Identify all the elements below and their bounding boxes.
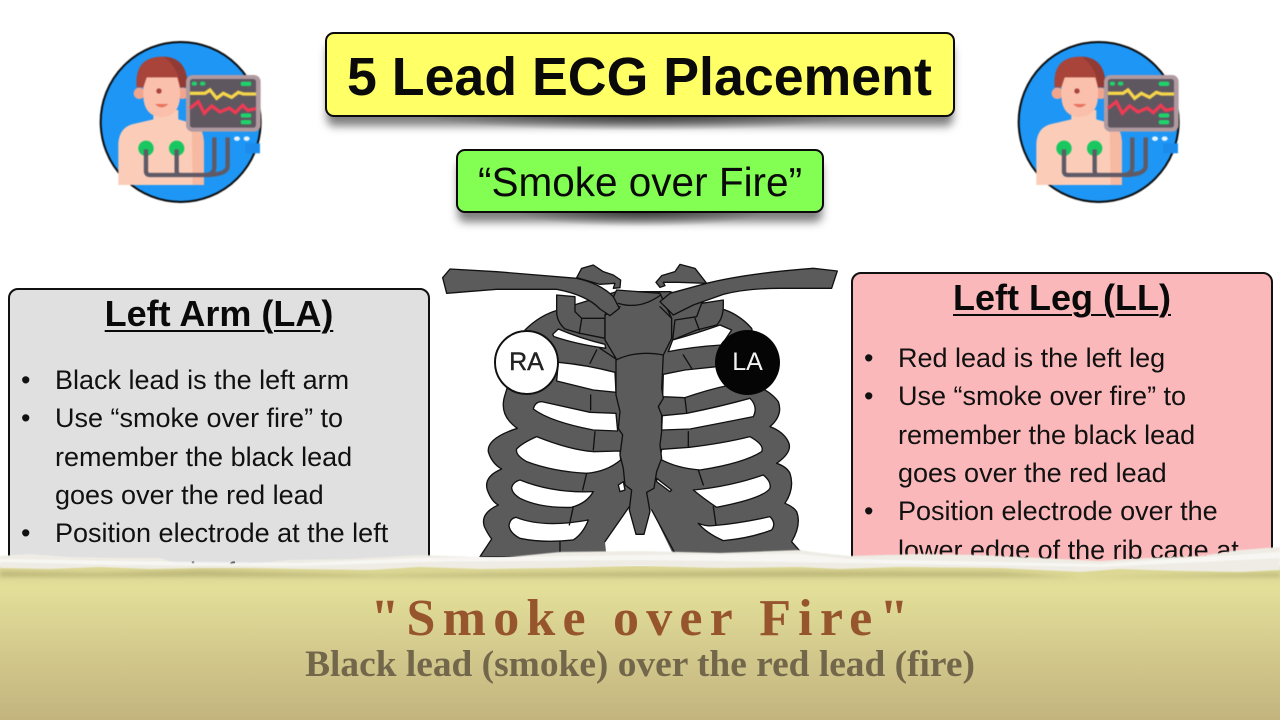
bullet list: left arm: • — [21, 403, 30, 433]
bullet list: left arm: Black lead is the left arm — [55, 365, 349, 395]
bullet list: left leg: Use “smoke over fire” to — [898, 381, 1186, 411]
panel: left arm — [8, 288, 430, 688]
bullet list: left arm: Use “smoke over fire” to — [55, 403, 343, 433]
rib silhouette — [480, 292, 805, 557]
bullet list: left arm: Position electrode at the left — [55, 518, 388, 548]
caption: explanation: Black lead (smoke) over the red lead (fire) — [305, 644, 975, 685]
heading: left leg: Left Leg (LL) — [953, 277, 1171, 318]
bullet list: left arm: goes over the red lead — [55, 480, 324, 510]
bullet list: left leg: Position electrode over the — [898, 496, 1218, 526]
bullet list: left leg: • — [864, 343, 873, 373]
bullet list: left arm: infraclavicular fossa — [55, 557, 292, 587]
torn white edge — [0, 547, 1280, 572]
bullet list: left arm: • — [21, 518, 30, 548]
bullet list: left leg: • — [864, 381, 873, 411]
title banner: 5 Lead ECG Placement — [347, 47, 932, 107]
RA electrode marker — [494, 330, 559, 395]
bullet list: left leg: goes over the red lead — [898, 458, 1167, 488]
heading: left arm: Left Arm (LA) — [105, 293, 333, 334]
bullet list: left arm: remember the black lead — [55, 442, 352, 472]
intercostal gaps — [509, 325, 774, 558]
bullet list: left leg: lower edge of the rib cage at — [898, 535, 1239, 565]
LA electrode marker: LA — [732, 348, 763, 376]
parchment background — [0, 566, 1280, 720]
sternal ends of first ribs — [577, 264, 707, 288]
RA electrode marker: RA — [509, 348, 544, 376]
title banner — [325, 32, 955, 117]
panel: left leg — [851, 272, 1273, 672]
clavicles — [443, 269, 619, 316]
bullet list: left leg: remember the black lead — [898, 420, 1195, 450]
sternum — [605, 290, 672, 534]
subtitle banner: “Smoke over Fire” — [478, 159, 802, 205]
bullet list: left arm: • — [21, 365, 30, 395]
bullet list: left leg: • — [864, 496, 873, 526]
LA electrode marker — [715, 330, 780, 395]
costal cartilage lines — [560, 318, 716, 555]
subtitle banner — [456, 149, 824, 213]
bullet list: left leg: Red lead is the left leg — [898, 343, 1165, 373]
bullet list: left leg — [864, 343, 1239, 565]
bullet list: left arm — [21, 365, 388, 587]
caption: Smoke over Fire: "Smoke over Fire" — [370, 590, 916, 647]
